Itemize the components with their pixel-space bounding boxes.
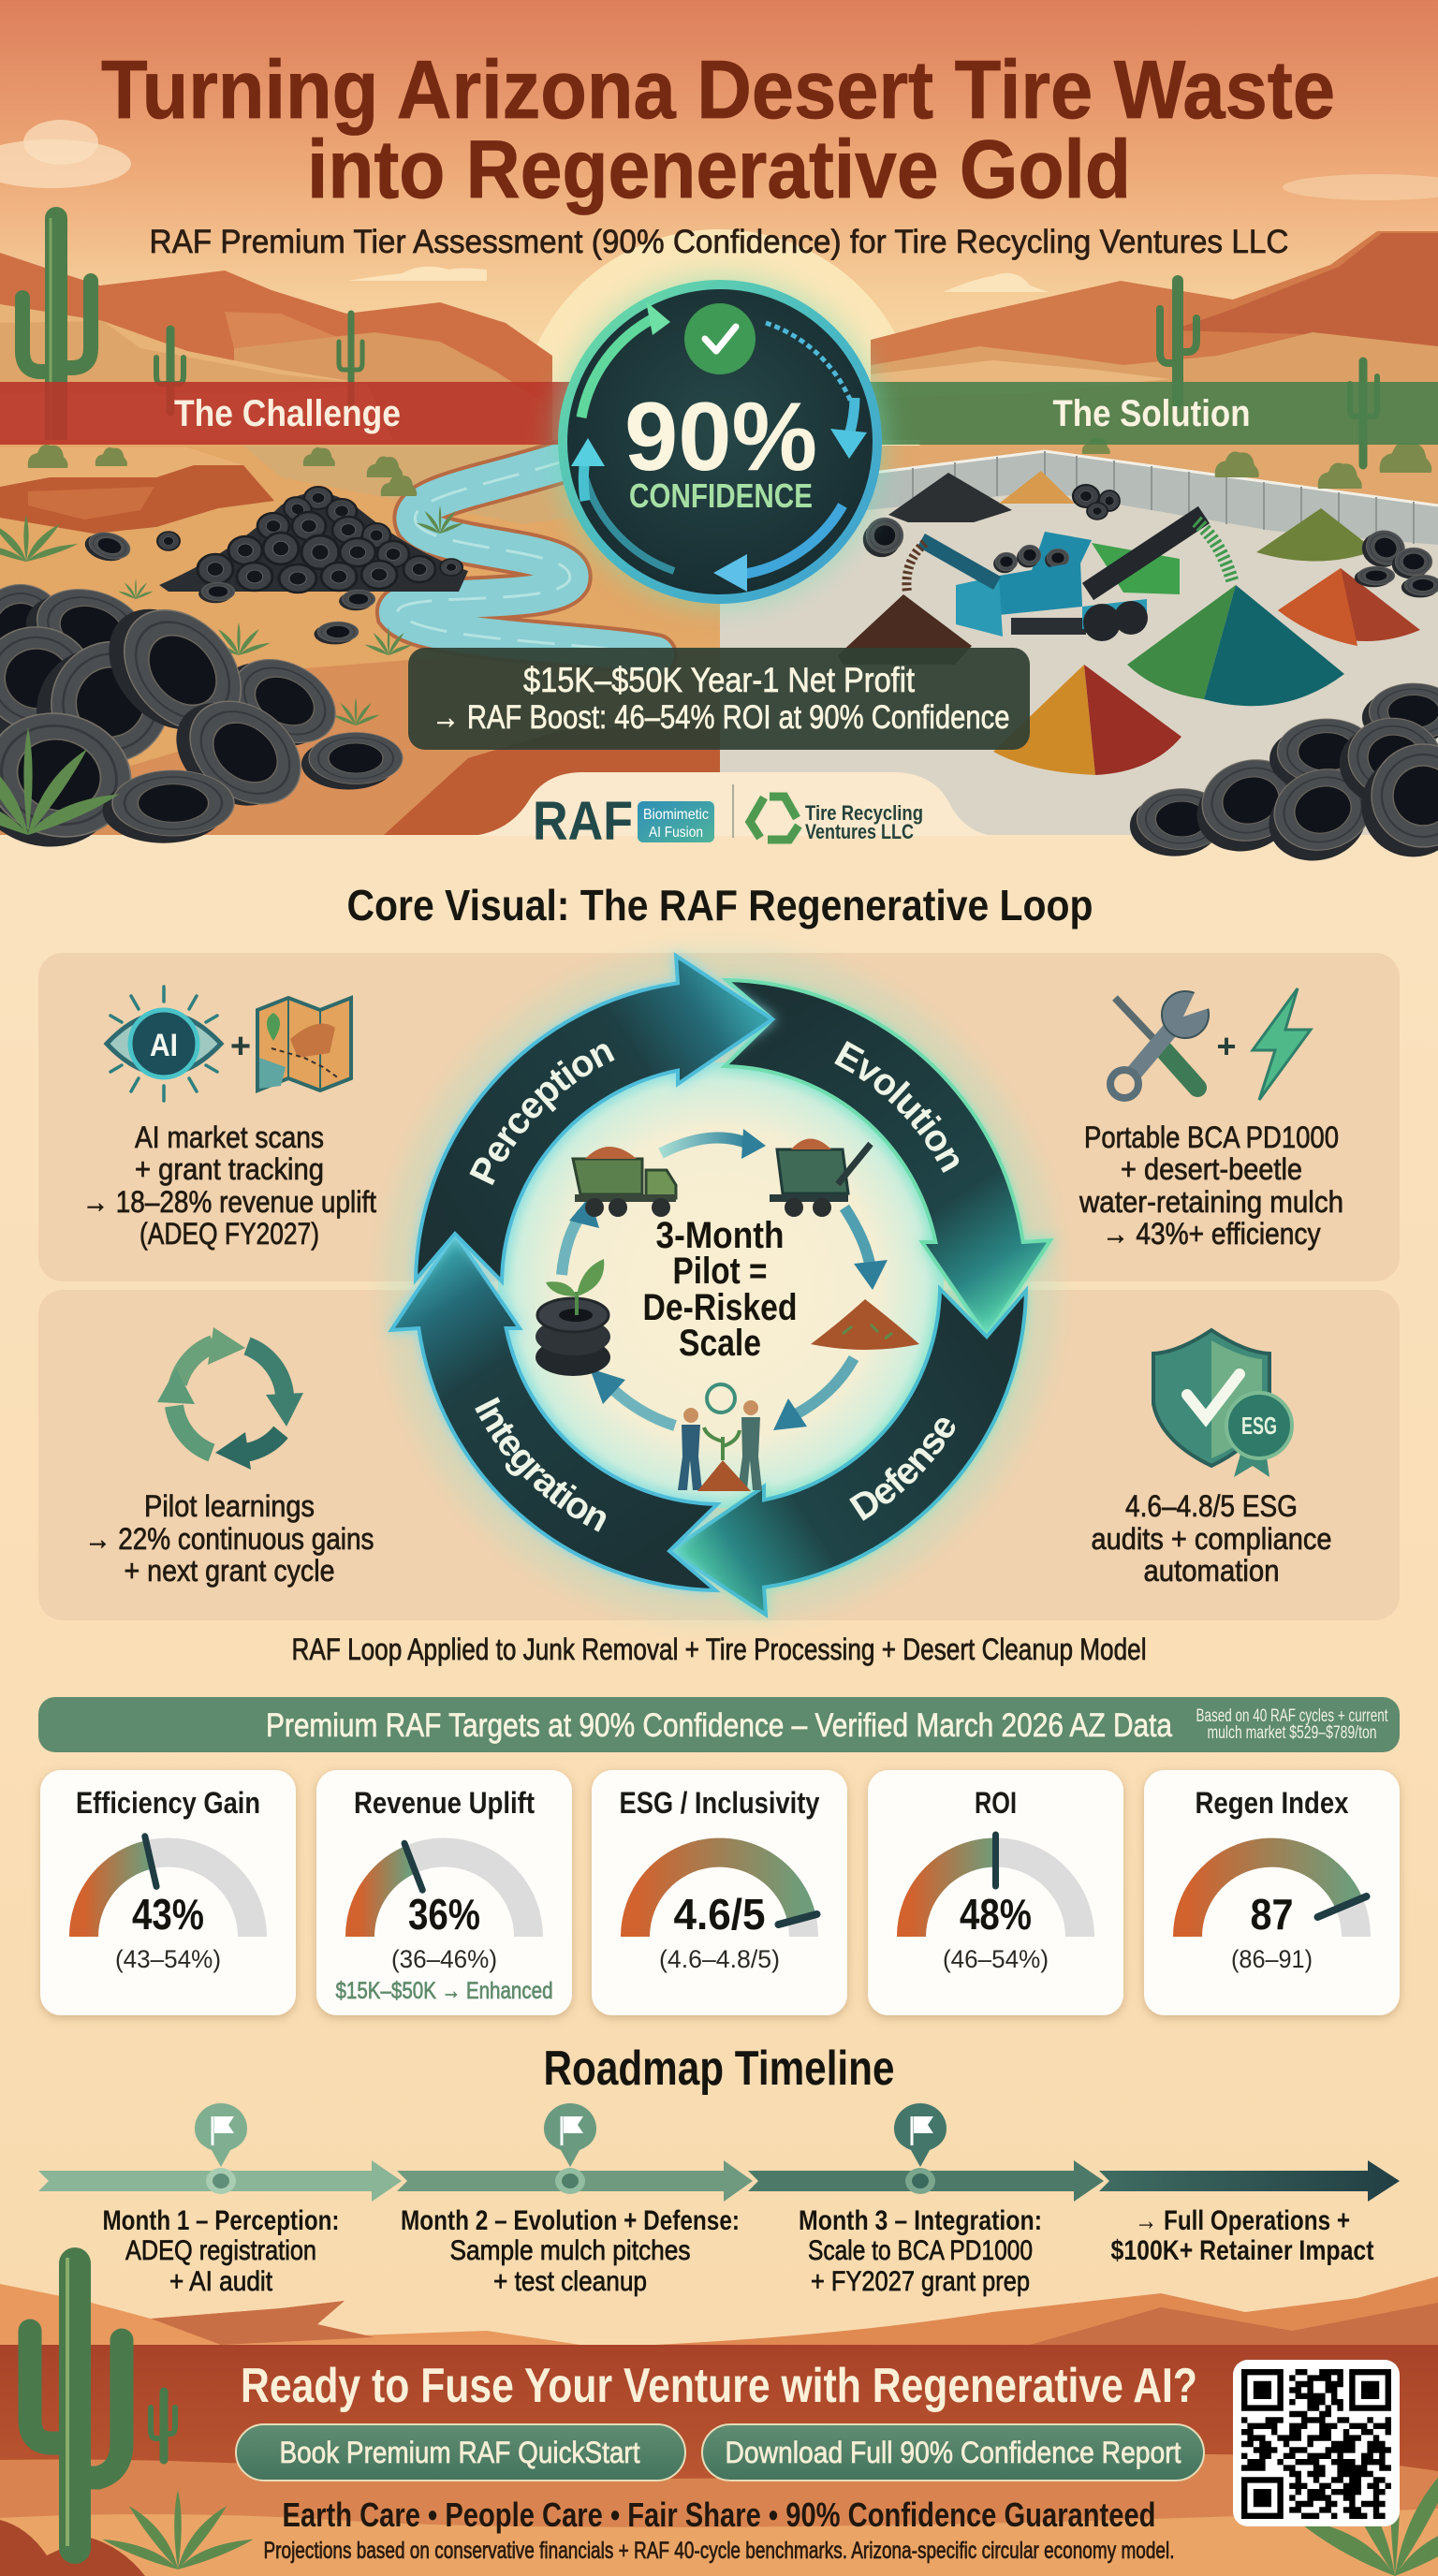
logo strip <box>473 772 992 852</box>
label: defense: Defense <box>849 1418 955 1521</box>
text: evolution: + desert-beetle <box>1121 1152 1302 1186</box>
timeline: month 2 text: Month 2 – Evolution + Defense: <box>401 2205 740 2236</box>
banner: the challenge: The Challenge <box>174 393 401 434</box>
tagline: Earth Care • People Care • Fair Share • 90% Confidence Guaranteed <box>283 2496 1155 2534</box>
timeline: month 3 text <box>799 2205 1042 2297</box>
heading: core visual: Core Visual: The RAF Regenerative Loop <box>346 881 1093 929</box>
title <box>101 43 1335 215</box>
button: book quickstart: Book Premium RAF QuickStart <box>279 2436 640 2469</box>
card: roi: 48% <box>960 1890 1032 1939</box>
badge check <box>684 303 756 374</box>
badge: 90% confidence <box>553 275 887 608</box>
milestone pin: month 1 <box>195 2103 247 2194</box>
timeline: month 1 text: Month 1 – Perception: <box>103 2205 339 2236</box>
inner arrow: mulch to workers <box>773 1358 854 1430</box>
icon: lightning bolt <box>1253 988 1311 1100</box>
icon: workers <box>678 1384 762 1491</box>
disclaimer: Projections based on conservative financials + RAF 40-cycle benchmarks. Arizona-specific circular economy model. <box>264 2538 1174 2564</box>
label: integration: Integration <box>475 1397 607 1532</box>
icon: AI eye: AI <box>150 1028 178 1063</box>
card: revenue uplift: $15K–$50K → Enhanced <box>335 1978 552 2004</box>
right piles <box>888 473 1012 522</box>
gauge <box>1187 1852 1367 1937</box>
text: evolution: water-retaining mulch <box>1078 1185 1343 1219</box>
timeline: full operations text <box>1110 2205 1374 2266</box>
card: regen index: 87 <box>1251 1890 1294 1939</box>
label: evolution: Evolution <box>834 1041 959 1173</box>
plus sign: + <box>1216 1027 1237 1065</box>
card: efficiency gain: 43% <box>132 1890 204 1939</box>
regenerative loop diagram <box>378 942 1064 1629</box>
timeline arrows <box>38 2160 1400 2202</box>
text: integration: + next grant cycle <box>124 1554 335 1588</box>
text: pilot statement <box>642 1215 798 1364</box>
profit callout: $15K–$50K Year-1 Net Profit <box>523 661 916 699</box>
logo strip: RAF <box>533 791 633 852</box>
timeline: month 2 text: + test cleanup <box>493 2266 647 2297</box>
arrow: integration <box>391 1234 717 1590</box>
label: perception: Perception <box>469 1044 615 1185</box>
icon: mulch pile <box>811 1299 919 1350</box>
gauge <box>635 1852 816 1937</box>
cta heading: Ready to Fuse Your Venture with Regenerative AI? <box>241 2359 1197 2413</box>
text: pilot statement: Scale <box>679 1323 761 1364</box>
inner arrow: workers to tires <box>590 1368 675 1426</box>
card: efficiency gain: (43–54%) <box>115 1945 221 1973</box>
timeline: month 3 text: Month 3 – Integration: <box>799 2205 1042 2236</box>
icon: dump truck <box>573 1147 676 1217</box>
icon: ESG shield: ESG <box>1241 1412 1277 1440</box>
card: efficiency gain <box>40 1770 296 2015</box>
icon: tire planter <box>536 1259 610 1376</box>
big tire pile <box>0 564 81 698</box>
timeline: month 1 text <box>103 2205 339 2297</box>
icon: bottom cacti and agaves <box>0 2258 1438 2576</box>
shredder machine <box>906 515 1233 641</box>
title: into Regenerative Gold <box>307 123 1131 215</box>
text: perception: (ADEQ FY2027) <box>139 1217 319 1251</box>
right mountains <box>871 231 1438 440</box>
card: roi: ROI <box>975 1786 1017 1820</box>
arrow: evolution <box>725 980 1050 1337</box>
right ground <box>720 446 1438 835</box>
timeline: month 2 text: Sample mulch pitches <box>449 2235 691 2266</box>
QR code <box>1233 2360 1400 2526</box>
button: download report <box>702 2424 1204 2481</box>
text: evolution: → 43%+ efficiency <box>1103 1217 1320 1251</box>
card: roi <box>868 1770 1123 2015</box>
icon: shredder <box>770 1138 871 1217</box>
targets banner <box>38 1697 1400 1752</box>
card: revenue uplift: (36–46%) <box>391 1945 497 1973</box>
panel: top <box>38 953 1400 1281</box>
left mountains <box>0 253 552 440</box>
text: defense: 4.6–4.8/5 ESG <box>1125 1489 1298 1523</box>
hero cacti <box>22 218 1196 463</box>
text: perception: AI market scans <box>135 1120 324 1154</box>
logo strip: Tire Recycling <box>805 801 923 825</box>
timeline: month 1 text: + AI audit <box>169 2266 273 2297</box>
text: pilot statement: Pilot = <box>672 1251 768 1292</box>
card: efficiency gain: Efficiency Gain <box>76 1786 260 1820</box>
text: perception: → 18–28% revenue uplift <box>82 1185 376 1219</box>
icon: recycling arrows <box>157 1327 303 1470</box>
inner arrow: shredder to mulch <box>844 1208 888 1290</box>
card: esg inclusivity: ESG / Inclusivity <box>620 1786 820 1820</box>
targets banner: Premium RAF Targets at 90% Confidence – Verified March 2026 AZ Data <box>266 1707 1172 1744</box>
text: evolution: Portable BCA PD1000 <box>1084 1120 1339 1154</box>
icon: ESG shield <box>1153 1330 1292 1477</box>
arrow: defense <box>669 1289 1026 1615</box>
icon: AI eye <box>107 987 221 1101</box>
timeline: month 2 text <box>401 2205 740 2297</box>
badge: 90% confidence: CONFIDENCE <box>629 476 813 515</box>
button: download report: Download Full 90% Confidence Report <box>725 2436 1181 2469</box>
timeline: month 3 text: + FY2027 grant prep <box>811 2266 1030 2297</box>
card: esg inclusivity: 4.6/5 <box>674 1890 766 1939</box>
button: book quickstart <box>236 2424 685 2481</box>
logo badge: Biomimetic <box>643 807 709 823</box>
text: pilot statement: 3-Month <box>655 1215 785 1256</box>
icon: map <box>257 998 351 1090</box>
gauge <box>912 1835 1080 1937</box>
heading: roadmap timeline: Roadmap Timeline <box>543 2042 895 2096</box>
panel: bottom <box>38 1290 1400 1620</box>
gauge <box>84 1837 253 1937</box>
text: integration: Pilot learnings <box>144 1489 315 1523</box>
card: revenue uplift: Revenue Uplift <box>354 1786 535 1820</box>
profit callout: → RAF Boost: 46–54% ROI at 90% Confidence <box>433 699 1009 736</box>
text: defense: audits + compliance <box>1092 1522 1331 1556</box>
card: esg inclusivity: (4.6–4.8/5) <box>659 1945 780 1973</box>
subtitle: RAF Premium Tier Assessment (90% Confidence) for Tire Recycling Ventures LLC <box>150 224 1288 260</box>
text: integration <box>84 1489 374 1588</box>
timeline: month 3 text: Scale to BCA PD1000 <box>808 2235 1033 2266</box>
logo badge: AI Fusion <box>649 825 703 841</box>
logo recycling icon <box>750 797 799 840</box>
gauge <box>360 1843 528 1937</box>
mid tire heap <box>159 492 468 592</box>
card: regen index: Regen Index <box>1195 1786 1349 1820</box>
text: integration: → 22% continuous gains <box>84 1522 374 1556</box>
text: defense: automation <box>1144 1554 1279 1588</box>
logo strip: Ventures LLC <box>805 820 914 843</box>
timeline: full operations text: $100K+ Retainer Impact <box>1110 2235 1374 2266</box>
logo badge <box>638 801 714 842</box>
banner: the solution: The Solution <box>1052 393 1251 434</box>
text: pilot statement: De-Risked <box>642 1287 798 1328</box>
icon: wrench and screwdriver <box>1110 988 1215 1098</box>
arrow: perception <box>416 956 772 1281</box>
card: esg inclusivity <box>592 1770 847 2015</box>
text: evolution <box>1078 1120 1343 1251</box>
timeline: full operations text: → Full Operations + <box>1135 2205 1350 2236</box>
hero illustration: desert scene <box>0 0 1438 871</box>
inner arrow: truck to shredder <box>661 1129 766 1159</box>
text: perception: + grant tracking <box>135 1152 324 1186</box>
text: perception <box>82 1120 376 1251</box>
title: Turning Arizona Desert Tire Waste <box>101 43 1335 136</box>
bottom dunes <box>0 2276 1438 2345</box>
card: revenue uplift: 36% <box>408 1890 480 1939</box>
milestone pin: month 2 <box>544 2103 596 2194</box>
card: regen index <box>1144 1770 1400 2015</box>
left ground <box>0 440 721 835</box>
targets banner: mulch market $529–$789/ton <box>1208 1723 1376 1743</box>
timeline: month 1 text: ADEQ registration <box>125 2235 316 2266</box>
banner: the challenge <box>0 382 599 445</box>
banner: the solution <box>843 382 1438 445</box>
profit callout <box>408 648 1030 750</box>
inner arrow: tires to truck <box>562 1196 599 1275</box>
milestone pin: month 3 <box>894 2103 946 2194</box>
plus sign: + <box>230 1027 251 1066</box>
card: revenue uplift <box>316 1770 572 2015</box>
call to action band <box>0 2345 1438 2576</box>
badge: 90% confidence: 90% <box>624 383 817 491</box>
card: roi: (46–54%) <box>943 1945 1049 1973</box>
text: defense <box>1092 1489 1331 1588</box>
caption: loop applied: RAF Loop Applied to Junk Removal + Tire Processing + Desert Cleanup Model <box>292 1632 1146 1666</box>
card: regen index: (86–91) <box>1231 1945 1313 1973</box>
